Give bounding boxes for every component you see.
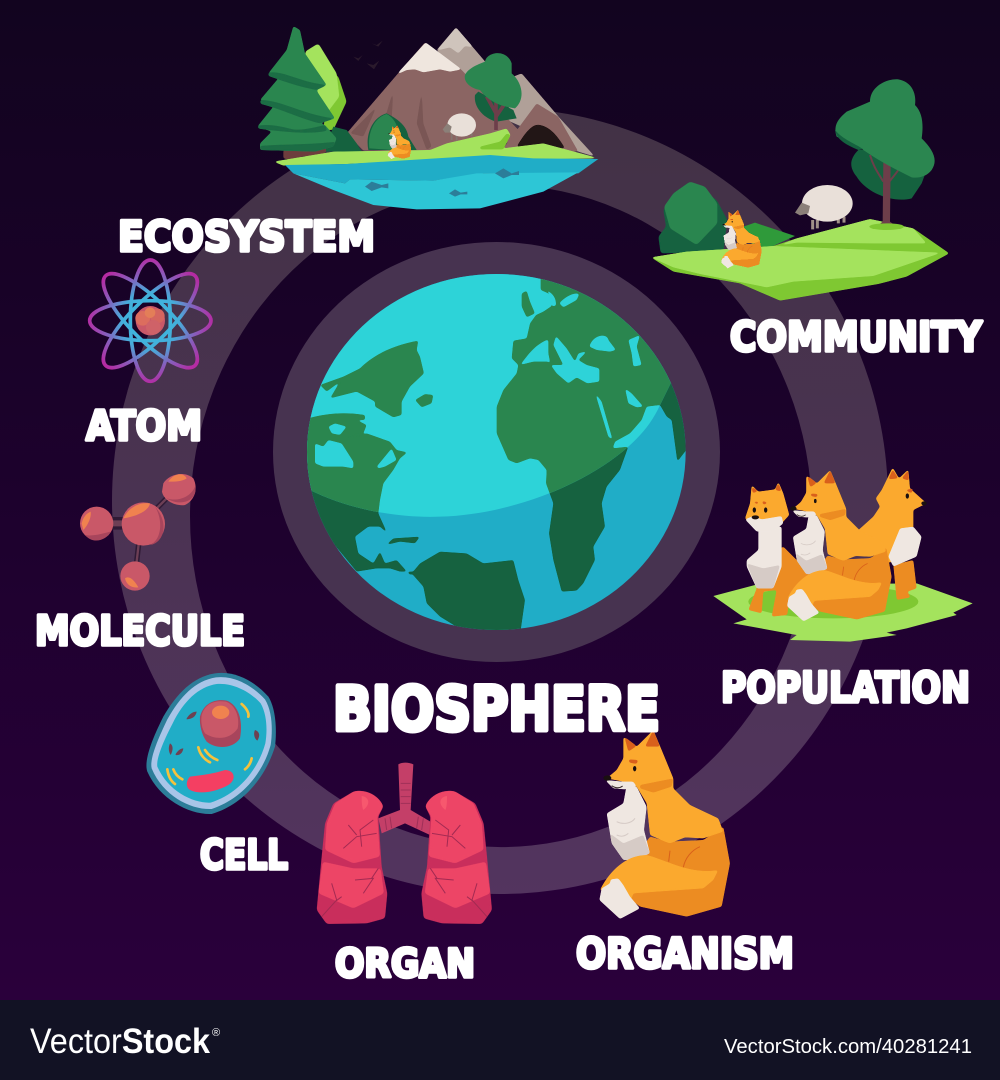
right lung [421, 791, 492, 924]
population ground [713, 583, 973, 642]
outer orbit ring [112, 108, 888, 894]
nucleus [135, 306, 165, 335]
label: ecosystem: ECOSYSTEM [118, 212, 375, 261]
dark shrub [323, 127, 362, 152]
middle fox [787, 470, 892, 621]
earth globe [307, 274, 686, 630]
population illustration [713, 467, 973, 642]
trachea [378, 763, 433, 835]
right fox face [906, 493, 927, 505]
molecule icon [80, 474, 196, 591]
ecosystem fox [388, 125, 411, 159]
label: organism: ORGANISM [576, 929, 794, 978]
nucleus [200, 700, 241, 747]
footer url: VectorStock.com/40281241 [724, 1036, 972, 1058]
pine tree [257, 26, 337, 161]
label: molecule: MOLECULE [35, 607, 245, 655]
community illustration [651, 79, 949, 301]
small green tree [465, 53, 522, 130]
ground [273, 128, 599, 166]
organism fox [599, 730, 730, 919]
label: atom: ATOM [86, 402, 202, 450]
lime bush [305, 43, 347, 130]
registered mark: ® [212, 1027, 220, 1039]
left fox [745, 482, 810, 617]
bush behind fox [368, 113, 417, 150]
label: organ: ORGAN [335, 942, 475, 987]
birds [353, 41, 383, 69]
lungs icon [317, 763, 492, 924]
hill behind fox [743, 223, 795, 247]
tree [835, 79, 935, 230]
footer logo: VectorStock [30, 1022, 210, 1061]
red organelle [187, 770, 234, 792]
label: cell: CELL [200, 831, 288, 879]
left lung [317, 791, 387, 924]
water [285, 155, 598, 209]
community fox [721, 210, 762, 268]
right fox [857, 467, 927, 600]
shrub [658, 182, 727, 253]
title: biosphere: BIOSPHERE [333, 674, 660, 745]
ecosystem illustration [257, 26, 599, 209]
meadow [651, 219, 949, 301]
cell icon [146, 673, 276, 814]
ecosystem sheep [443, 113, 476, 141]
footer bar [0, 1000, 1000, 1080]
ring around earth [273, 242, 720, 662]
mountains [347, 27, 595, 157]
atom icon [90, 260, 211, 381]
community sheep [795, 185, 853, 229]
